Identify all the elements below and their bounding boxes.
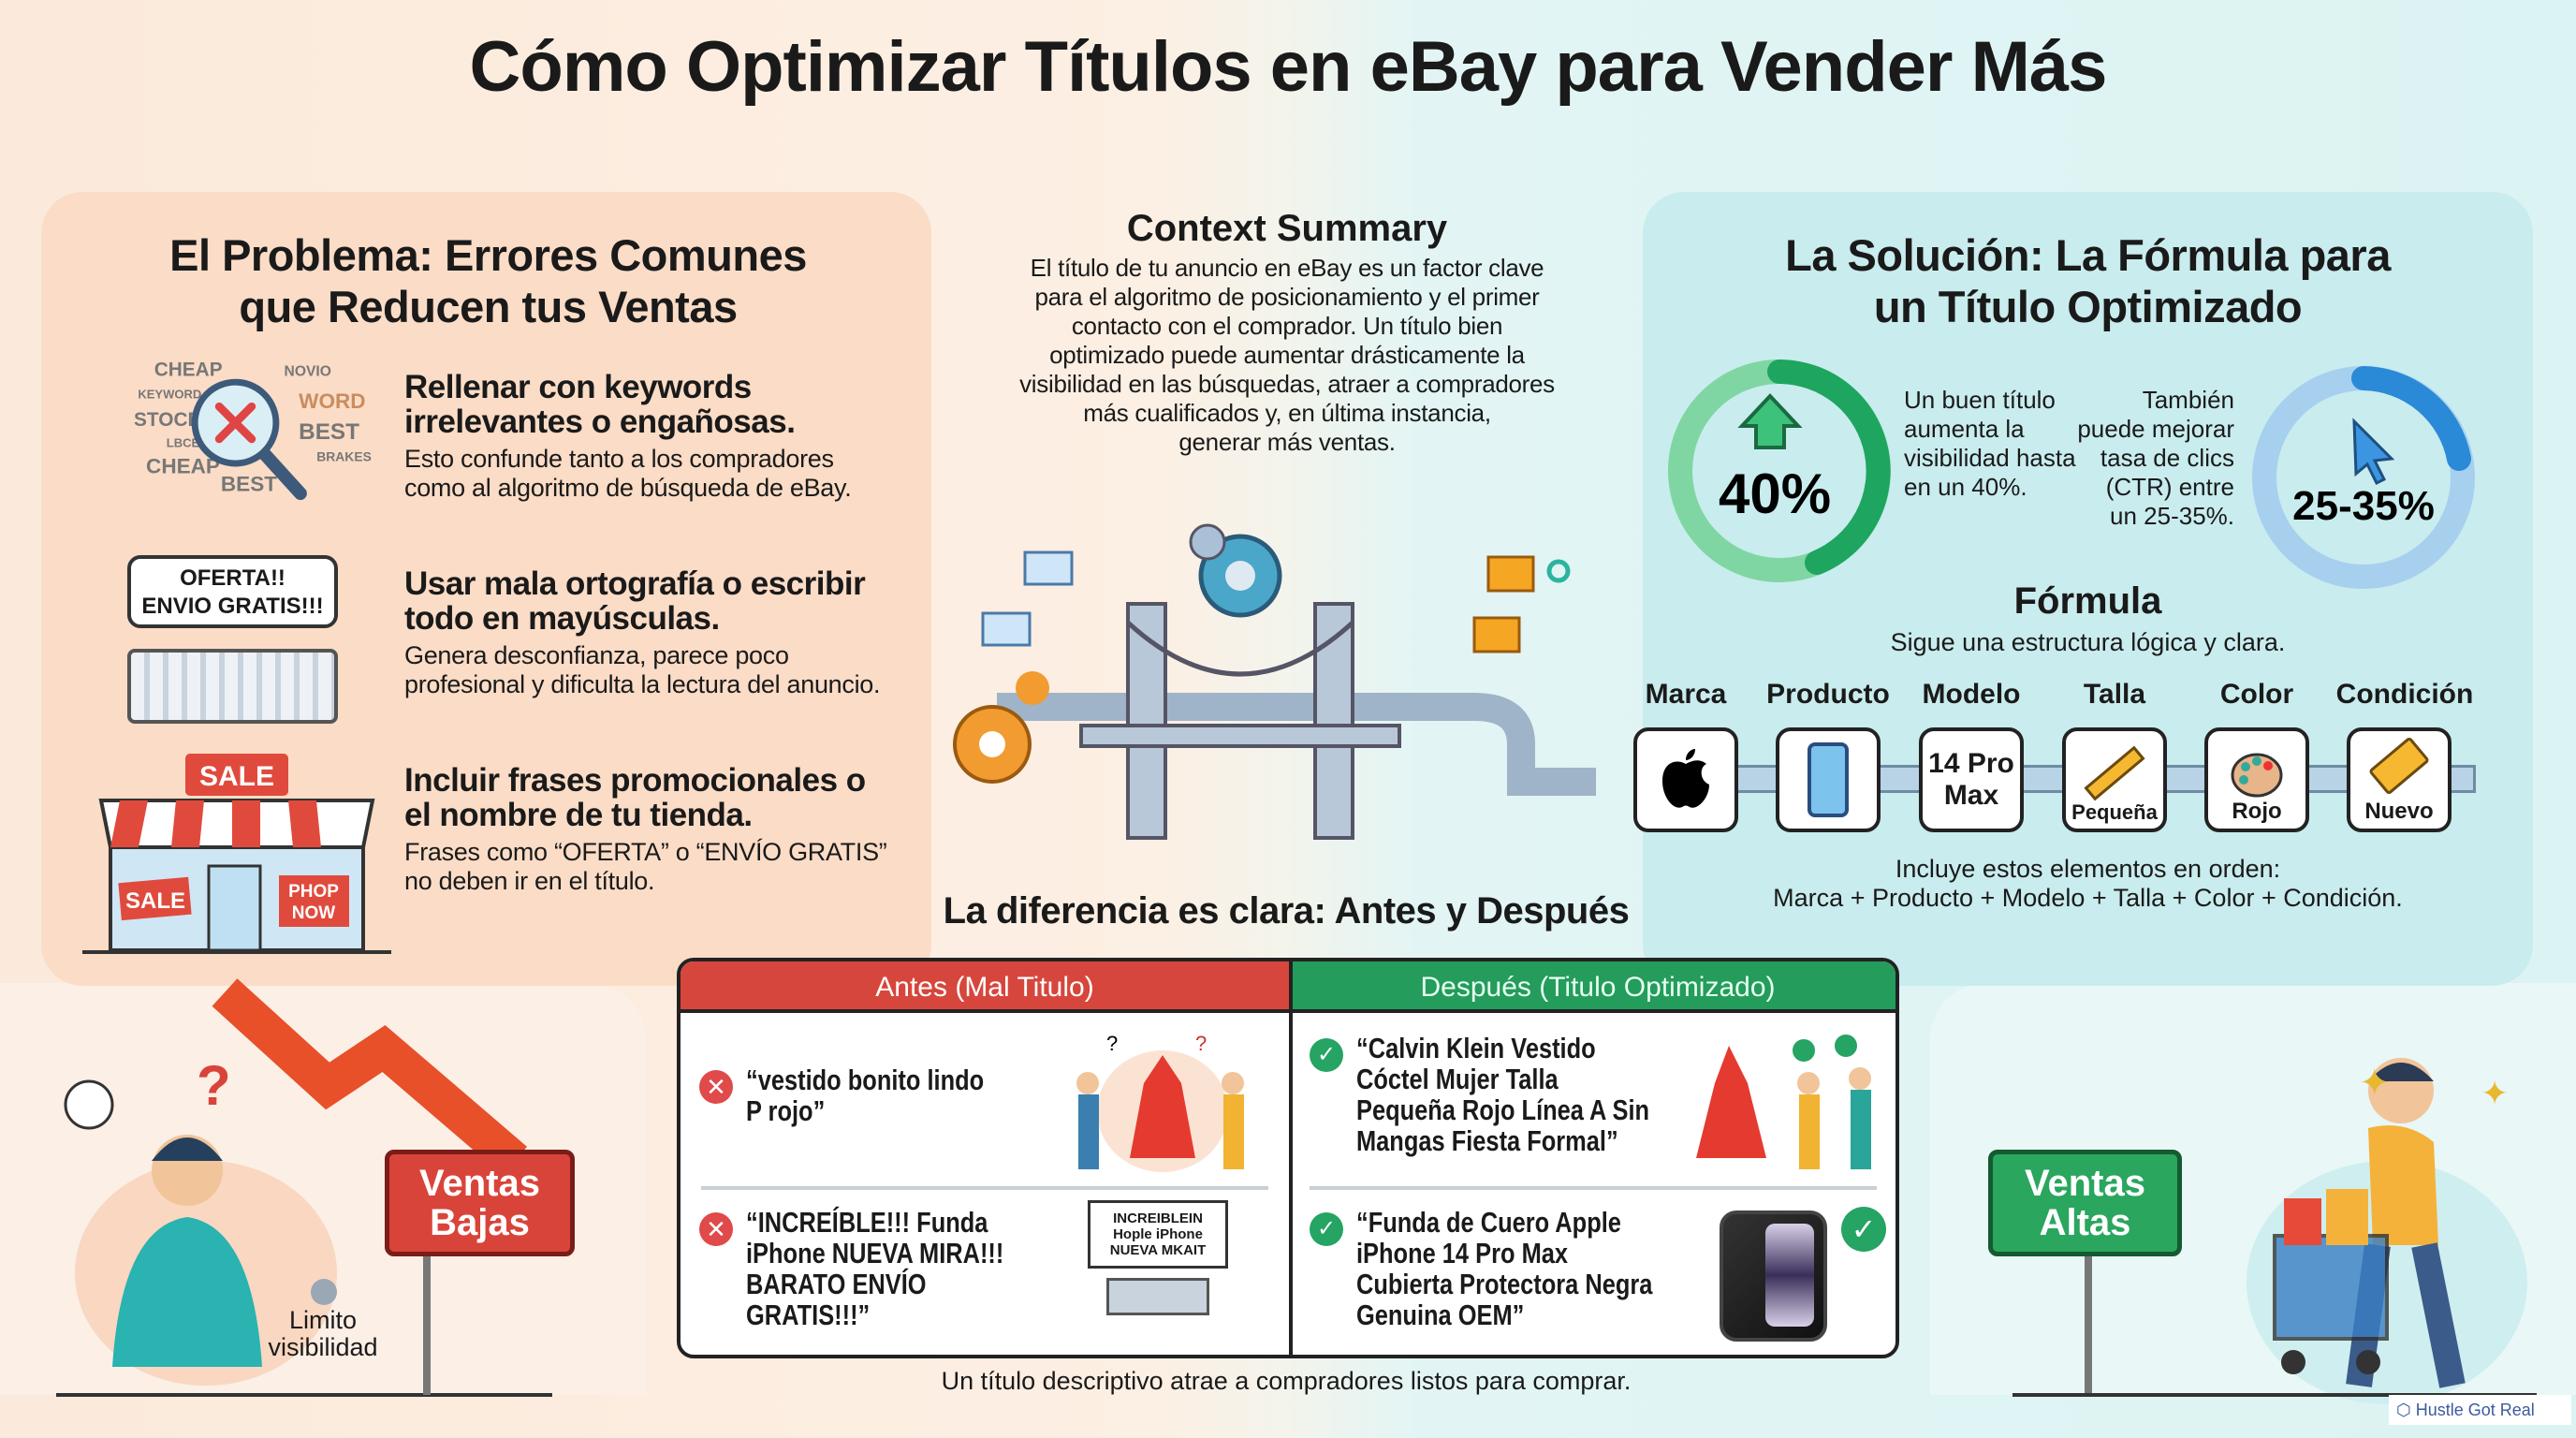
header: before [681, 961, 1289, 1013]
illustration: shouting ad: Hople iPhone [1113, 1226, 1203, 1242]
background blob: left bottom [0, 983, 646, 1395]
row: after 2 [1310, 1206, 1653, 1331]
row: before 1: “vestido bonito lindo [746, 1064, 984, 1096]
icon: apple [1633, 727, 1738, 832]
icon: magnifier with keywords [134, 359, 372, 500]
text: CTR stat: puede mejorar [2077, 415, 2234, 443]
text: CTR stat: un 25-35%. [2110, 502, 2234, 530]
model box [1919, 727, 2024, 832]
table: before/after [677, 958, 1899, 1358]
sign: high sales [1988, 1150, 2182, 1256]
header: after: Después (Titulo Optimizado) [1420, 972, 1776, 1003]
header: after [1289, 961, 1903, 1013]
formula labels: Color [2220, 679, 2293, 710]
text block: keywords: Esto confunde tanto a los compradores [404, 445, 834, 473]
icon: magnifier with keywords: STOCE [134, 409, 200, 431]
icon: magnifier with keywords: NOVIO [285, 363, 331, 379]
context summary: visibilidad en las búsquedas, atraer a compradores [1019, 370, 1555, 398]
heading: problem: El Problema: Errores Comunes [169, 230, 807, 280]
context summary: más cualificados y, en última instancia, [1083, 399, 1491, 427]
text block: spelling: profesional y dificulta la lectura del anuncio. [404, 670, 880, 698]
text: visibility stat [1904, 386, 2076, 501]
context summary: El título de tu anuncio en eBay es un factor clave [1031, 254, 1544, 282]
sign: high sales: Altas [2040, 1202, 2130, 1243]
icon: magnifier with keywords: BEST [299, 419, 359, 445]
context summary: Context Summary [1127, 208, 1447, 249]
heading: solution [1785, 230, 2392, 331]
icon: magnifier with keywords: KEYWORD [138, 388, 201, 402]
illustration: confused shoppers with dress: ? [1106, 1032, 1118, 1055]
heading: problem: que Reducen tus Ventas [239, 282, 738, 331]
row: before 2 [699, 1206, 1003, 1331]
formula labels: Producto [1766, 679, 1890, 710]
text: formula order: Incluye estos elementos en orden: [1895, 855, 2280, 883]
illustration: shouting ad: NUEVA MKAIT [1110, 1242, 1206, 1258]
context summary: contacto con el comprador. Un título bien [1072, 312, 1502, 340]
text block: promo [404, 762, 886, 895]
text block: spelling [404, 565, 880, 698]
text: limited visibility: Limito [289, 1306, 357, 1334]
row: after 2: Cubierta Protectora Negra [1356, 1268, 1652, 1300]
icon: palette: Rojo [2232, 799, 2282, 824]
row: after 1: ✓ [1317, 1042, 1336, 1067]
text block: promo: no deben ir en el título. [404, 867, 654, 895]
background blob: right bottom [1930, 983, 2576, 1395]
text block: keywords: irrelevantes o engañosas. [404, 404, 795, 440]
icon: speech bubble and keyboard: ENVIO GRATIS!!! [141, 594, 324, 619]
formula labels: Modelo [1923, 679, 2020, 710]
illustration: shopper with cart: ✦ [2481, 1075, 2509, 1113]
sign: low sales: Bajas [430, 1202, 530, 1243]
pipe [1643, 765, 2476, 793]
row: before 2: GRATIS!!!” [746, 1299, 870, 1331]
text block: promo: Frases como “OFERTA” o “ENVÍO GRATIS” [404, 838, 886, 866]
formula labels: Talla [2084, 679, 2145, 710]
context summary: generar más ventas. [1178, 428, 1396, 456]
icon: magnifier with keywords: WORD [299, 389, 366, 413]
icon: speech bubble and keyboard: OFERTA!! [180, 565, 285, 591]
formula boxes [1633, 727, 2452, 832]
context summary: para el algoritmo de posicionamiento y el primer [1034, 283, 1540, 311]
illustration: bridge with gears and pipe [953, 524, 1596, 840]
text: formula order [1773, 855, 2403, 912]
heading: problem [169, 230, 807, 331]
illustration: shouting ad: INCREIBLEIN [1113, 1211, 1203, 1226]
text: limited visibility [268, 1306, 378, 1361]
illustration: confused shoppers with dress [1076, 1032, 1244, 1172]
icon: store front [82, 754, 391, 954]
row: after 1: Mangas Fiesta Formal” [1356, 1124, 1618, 1157]
watermark [2389, 1395, 2571, 1425]
caption: Un título descriptivo atrae a compradores listos para comprar. [942, 1367, 1631, 1395]
text: visibility stat: Un buen título [1904, 386, 2056, 414]
icon: magnifier with keywords: BRAKES [316, 448, 372, 463]
header: before: Antes (Mal Titulo) [875, 972, 1094, 1003]
chart: 40% ring: 40% [1719, 462, 1831, 525]
row: before 2: BARATO ENVÍO [746, 1268, 927, 1300]
icon: check badge [1841, 1207, 1886, 1252]
text: CTR stat: tasa de clics [2100, 444, 2234, 472]
heading: solution: un Título Optimizado [1874, 282, 2302, 331]
row: after 2: Genuina OEM” [1356, 1299, 1524, 1331]
text: visibility stat: en un 40%. [1904, 473, 2027, 501]
text block: spelling: Genera desconfianza, parece poco [404, 641, 789, 669]
heading: solution: La Solución: La Fórmula para [1785, 230, 2391, 280]
icon: ruler [2062, 727, 2167, 832]
sign: low sales: Ventas [419, 1163, 540, 1204]
text block: keywords: Rellenar con keywords [404, 369, 752, 405]
text: CTR stat: (CTR) entre [2106, 473, 2234, 501]
icon: tag: Nuevo [2364, 799, 2434, 824]
text block: keywords: como al algoritmo de búsqueda de eBay. [404, 474, 851, 502]
row: after 1: Cóctel Mujer Talla [1356, 1063, 1559, 1095]
icon: magnifier with keywords: LBCE [167, 436, 199, 450]
row: before 1 [699, 1064, 984, 1127]
icon: store front: SALE [199, 761, 274, 792]
illustration: shopper with cart: ✦ [2359, 1062, 2391, 1105]
row: after 2: ✓ [1317, 1216, 1336, 1241]
icon: store front: SALE [125, 888, 185, 914]
chart: 40% ring [1668, 360, 1891, 582]
heading: before and after: La diferencia es clara: Antes y Después [944, 890, 1629, 932]
text: limited visibility: visibilidad [268, 1333, 378, 1361]
context summary [1019, 208, 1555, 456]
chart: 25-35% ring [2252, 366, 2475, 589]
illustration: iPhone [1720, 1211, 1827, 1342]
text: CTR stat [2077, 386, 2234, 530]
sign post: high sales [2085, 1245, 2092, 1395]
text block: promo: el nombre de tu tienda. [404, 797, 753, 833]
text block: promo: Incluir frases promocionales o [404, 762, 866, 799]
text: formula order: Marca + Producto + Modelo + Talla + Color + Condición. [1773, 884, 2403, 912]
row: after 1: “Calvin Klein Vestido [1356, 1032, 1596, 1064]
formula labels: Marca [1646, 679, 1726, 710]
panel: problem [41, 192, 931, 986]
text block: spelling: todo en mayúsculas. [404, 600, 720, 637]
row: before 1: P rojo” [746, 1094, 825, 1127]
icon: phone [1776, 727, 1881, 832]
text: visibility stat: aumenta la [1904, 415, 2025, 443]
icon: tag [2347, 727, 2452, 832]
sign: high sales: Ventas [2025, 1163, 2145, 1204]
text block: spelling: Usar mala ortografía o escribir [404, 565, 865, 602]
illustration: shouting ad [1088, 1200, 1228, 1315]
illustration: happy shoppers with dress [1696, 1034, 1871, 1169]
row: after 1 [1310, 1032, 1649, 1157]
illustration: shopper with cart [2012, 1058, 2537, 1404]
icon: palette [2204, 727, 2309, 832]
row: before 2: iPhone NUEVA MIRA!!! [746, 1237, 1003, 1269]
row: after 1: Pequeña Rojo Línea A Sin [1356, 1093, 1649, 1126]
row: before 2: “INCREÍBLE!!! Funda [746, 1206, 988, 1239]
icon: speech bubble and keyboard [127, 555, 338, 724]
icon: magnifier with keywords: CHEAP [146, 454, 220, 477]
text: formula subtitle: Sigue una estructura lógica y clara. [1891, 628, 2285, 656]
illustration: sad seller with falling arrow [56, 978, 552, 1397]
formula labels: Condición [2336, 679, 2473, 710]
formula labels [1646, 679, 2473, 710]
icon: magnifier with keywords: BEST [221, 472, 277, 495]
icon: ruler: Pequeña [2071, 800, 2158, 824]
context summary: optimizado puede aumentar drásticamente la [1049, 341, 1525, 369]
model box: 14 Pro [1928, 748, 2014, 779]
row: after 2: “Funda de Cuero Apple [1356, 1206, 1621, 1239]
icon: check badge: ✓ [1852, 1212, 1876, 1246]
model box: Max [1944, 780, 1998, 811]
icon: store front: PHOP [288, 882, 339, 902]
illustration: confused shoppers with dress: ? [1195, 1032, 1207, 1055]
icon: magnifier with keywords: CHEAP [154, 359, 223, 380]
title: Cómo Optimizar Títulos en eBay para Vender Más [470, 27, 2106, 107]
panel: solution [1643, 192, 2533, 986]
row: after 2: iPhone 14 Pro Max [1356, 1237, 1568, 1269]
row: before 1: ✕ [706, 1073, 726, 1101]
row: before 2: ✕ [706, 1215, 726, 1243]
text: CTR stat: También [2143, 386, 2234, 414]
sign: low sales [385, 1150, 575, 1256]
text: visibility stat: visibilidad hasta [1904, 444, 2076, 472]
icon: store front: NOW [292, 903, 335, 923]
illustration: sad seller with falling arrow: ? [197, 1054, 231, 1117]
watermark: ⬡ Hustle Got Real [2396, 1401, 2535, 1419]
heading: formula: Fórmula [2014, 580, 2161, 622]
text block: keywords [404, 369, 851, 502]
chart: 25-35% ring: 25-35% [2292, 483, 2435, 529]
